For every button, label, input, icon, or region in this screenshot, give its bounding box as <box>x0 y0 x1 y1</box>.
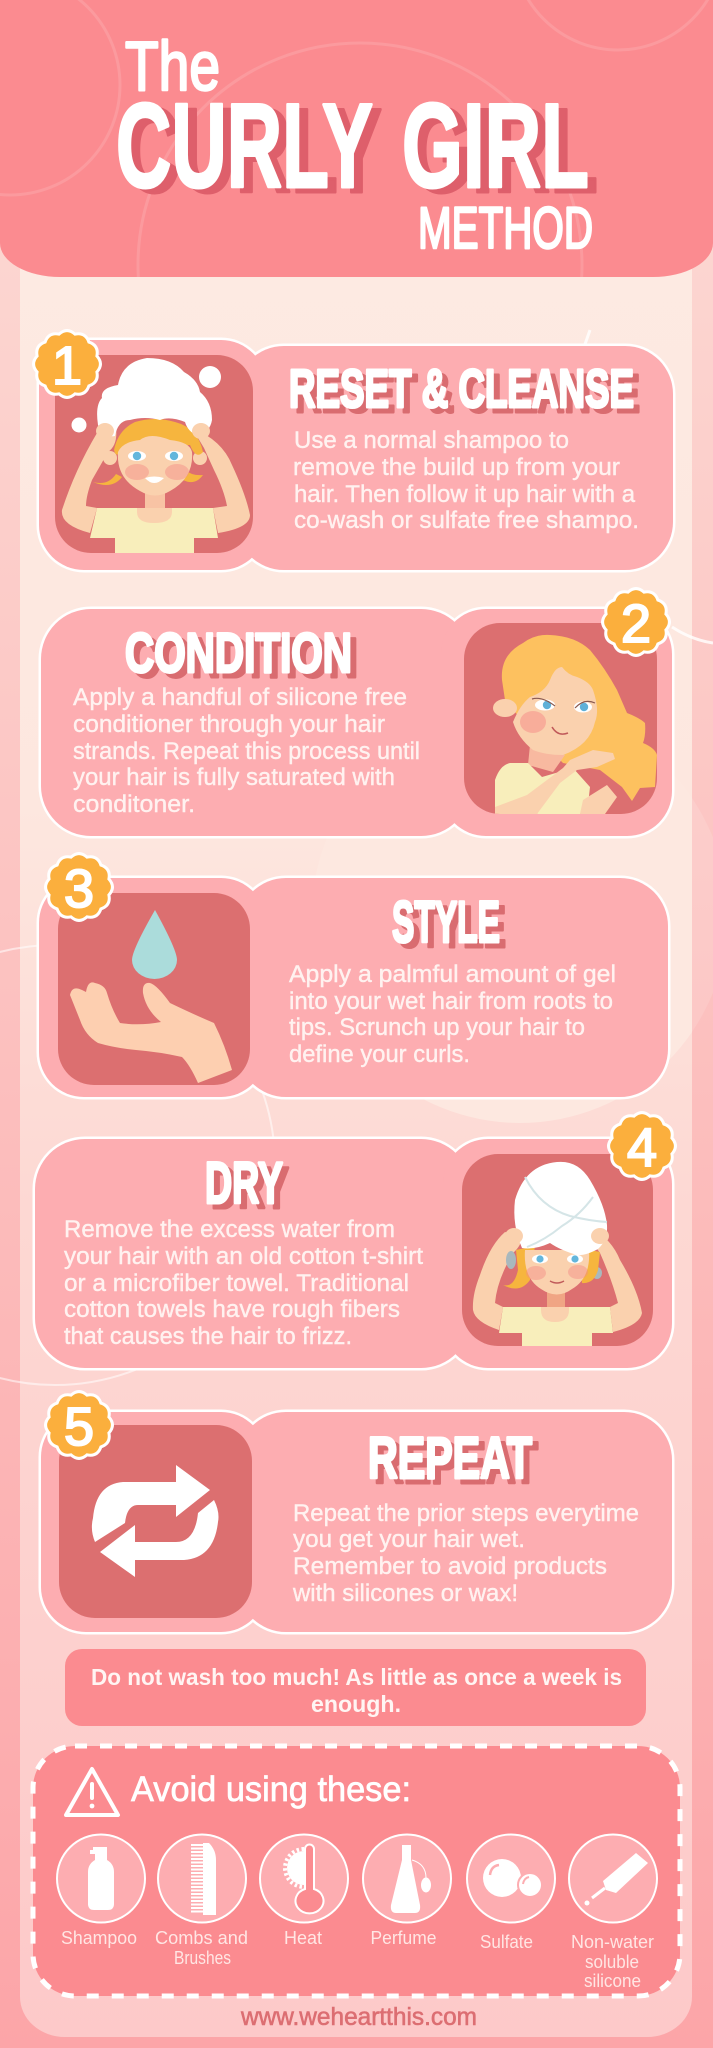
heading: style <box>392 890 506 960</box>
badge 5 <box>46 1392 112 1458</box>
title: CURLY <box>125 84 382 218</box>
body text: co-wash or sulfate free shampo. <box>294 507 639 534</box>
illustration: girl running conditioner through hair <box>464 623 657 814</box>
title: CURLY <box>116 79 373 213</box>
body text: cotton towels have rough fibers <box>64 1296 400 1323</box>
badge 5: 5 <box>64 1397 94 1457</box>
item: combs and brushes: Combs and <box>155 1927 248 1948</box>
item: non-water soluble silicone: Non-water <box>571 1931 654 1952</box>
badge 3: 3 <box>64 859 94 919</box>
illustration: girl washing hair with foam <box>55 355 253 553</box>
header banner <box>0 0 713 277</box>
body text: tips. Scrunch up your hair to <box>289 1014 585 1041</box>
step 3 card: style <box>39 854 668 1097</box>
body text <box>289 961 616 1068</box>
body text <box>64 1216 423 1350</box>
step 4 card: dry <box>35 1113 675 1368</box>
body text: into your wet hair from roots to <box>289 988 613 1015</box>
icon: repeat arrows <box>59 1425 252 1618</box>
body text: conditioner through your hair <box>73 711 385 738</box>
item: sulfate <box>467 1834 555 1952</box>
badge 3 <box>46 854 112 920</box>
panel: avoid using these <box>33 1746 680 1996</box>
body text: conditoner. <box>73 791 195 818</box>
item: non-water soluble silicone <box>569 1834 657 1991</box>
body text: or a microfiber towel. Traditional <box>64 1270 409 1297</box>
callout: wash frequency: enough. <box>311 1691 401 1717</box>
heading: dry: DRY <box>211 1156 289 1221</box>
heading: style: STYLE <box>392 890 500 955</box>
body text: hair. Then follow it up hair with a <box>294 481 636 508</box>
step 1 card: reset and cleanse <box>34 331 673 570</box>
body text: define your curls. <box>289 1041 470 1068</box>
title: GIRL <box>402 79 589 213</box>
heading: repeat <box>368 1426 538 1496</box>
badge 1 <box>34 331 100 397</box>
item: perfume: Perfume <box>370 1927 436 1948</box>
body text: with silicones or wax! <box>292 1580 518 1607</box>
body text: your hair is fully saturated with <box>73 764 395 791</box>
item: combs and brushes <box>155 1834 248 1968</box>
heading: avoid using these: Avoid using these: <box>131 1770 411 1809</box>
item: shampoo: Shampoo <box>61 1927 137 1948</box>
heading: dry <box>205 1151 289 1221</box>
callout: wash frequency <box>65 1649 646 1726</box>
badge 2 <box>603 589 669 655</box>
title <box>116 27 598 261</box>
item: non-water soluble silicone: soluble <box>585 1951 639 1972</box>
title: GIRL <box>411 84 598 218</box>
badge 1: 1 <box>52 336 82 396</box>
item: heat: Heat <box>284 1927 322 1948</box>
body text <box>292 1500 639 1607</box>
body text: remove the build up from your <box>293 454 620 481</box>
body text: Apply a palmful amount of gel <box>289 961 616 988</box>
illustration: gel drop over a hand <box>58 893 250 1085</box>
item: non-water soluble silicone: silicone <box>584 1970 641 1991</box>
item: sulfate: Sulfate <box>480 1931 533 1952</box>
body text <box>293 427 639 534</box>
body text: Remove the excess water from <box>64 1216 395 1243</box>
illustration: girl with towel on head <box>462 1154 653 1347</box>
body text: Use a normal shampoo to <box>294 427 569 454</box>
badge 4: 4 <box>627 1118 657 1178</box>
badge 4 <box>609 1113 675 1179</box>
item: combs and brushes: Brushes <box>174 1947 231 1968</box>
body text: that causes the hair to frizz. <box>64 1323 352 1350</box>
heading: repeat: REPEAT <box>368 1426 532 1491</box>
heading: condition: CONDITION <box>131 626 358 689</box>
title: METHOD <box>418 196 593 261</box>
item: shampoo <box>57 1834 145 1948</box>
body text <box>73 684 420 818</box>
heading: repeat: REPEAT <box>374 1431 538 1496</box>
heading: style: STYLE <box>398 895 506 960</box>
item: heat <box>260 1834 348 1948</box>
callout: wash frequency: Do not wash too much! As little as once a week is <box>91 1664 622 1690</box>
body text: you get your hair wet. <box>293 1526 525 1553</box>
body text: Remember to avoid products <box>293 1553 607 1580</box>
footer url: www.weheartthis.com <box>240 2003 477 2031</box>
body text: strands. Repeat this process until <box>73 738 420 765</box>
body text: Apply a handful of silicone free <box>73 684 407 711</box>
step 5 card: repeat <box>41 1392 672 1632</box>
body text: your hair with an old cotton t-shirt <box>64 1243 423 1270</box>
item: perfume <box>363 1834 451 1948</box>
title: The <box>125 27 220 105</box>
step 2 card: condition <box>41 589 672 836</box>
body text: Repeat the prior steps everytime <box>293 1500 639 1527</box>
heading: condition: CONDITION <box>125 621 352 684</box>
badge 2: 2 <box>621 594 651 654</box>
heading: dry: DRY <box>205 1151 283 1216</box>
icon: warning triangle <box>66 1769 118 1815</box>
